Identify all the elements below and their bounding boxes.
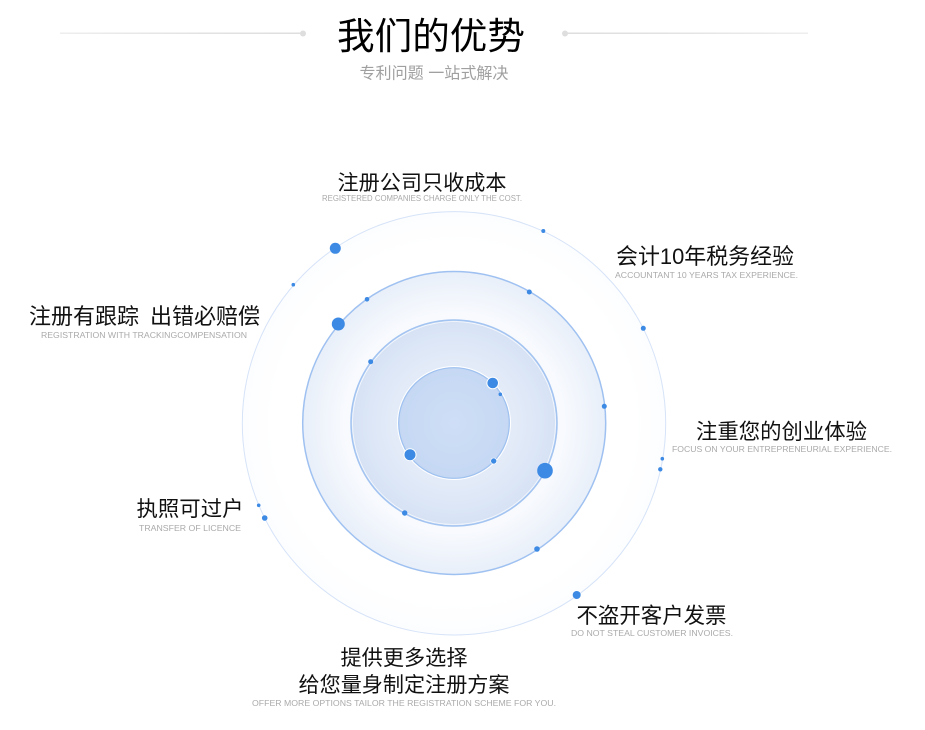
label: 会计10年税务经验: 会计10年税务经验 xyxy=(616,244,794,269)
label: 提供更多选择 给您量身制定注册方案 xyxy=(252,647,556,708)
label: 注册公司只收成本 xyxy=(322,172,522,203)
concentric circle diagram xyxy=(242,212,666,635)
label: 注册有跟踪 出错必赔偿 xyxy=(29,304,260,340)
label: 注重您的创业体验: 注重您的创业体验 xyxy=(696,420,867,444)
ring: outer xyxy=(242,212,666,635)
label: 提供更多选择 给您量身制定注册方案: 给您量身制定注册方案 xyxy=(298,674,510,697)
header divider: left xyxy=(60,30,306,36)
label: 不盗开客户发票: DO NOT STEAL CUSTOMER INVOICES. xyxy=(571,628,733,638)
label: 提供更多选择 给您量身制定注册方案: 提供更多选择 xyxy=(340,647,468,670)
label: 执照可过户: TRANSFER OF LICENCE xyxy=(139,523,241,533)
ring: second xyxy=(303,272,606,574)
label: 注册公司只收成本: REGISTERED COMPANIES CHARGE ONLY THE COST. xyxy=(322,193,522,203)
label: 注册有跟踪 出错必赔偿: 注册有跟踪 xyxy=(29,304,139,329)
subtitle: 专利问题 一站式解决 xyxy=(360,64,508,82)
ring: third xyxy=(351,320,557,526)
label: 会计10年税务经验: ACCOUNTANT 10 YEARS TAX EXPERIENCE. xyxy=(615,270,798,280)
label: 注册有跟踪 出错必赔偿: 出错必赔偿 xyxy=(150,304,260,329)
label: 注册有跟踪 出错必赔偿: REGISTRATION WITH TRACKINGCOMPENSATION xyxy=(41,330,247,340)
label: 注册公司只收成本: 注册公司只收成本 xyxy=(338,172,506,195)
label: 不盗开客户发票: 不盗开客户发票 xyxy=(576,604,726,628)
label: 执照可过户 xyxy=(136,498,244,533)
title: 我们的优势 xyxy=(337,16,525,57)
label: 注重您的创业体验: FOCUS ON YOUR ENTREPRENEURIAL EXPERIENCE. xyxy=(672,444,892,454)
label: 注重您的创业体验 xyxy=(672,420,892,454)
label: 不盗开客户发票 xyxy=(571,604,733,638)
label: 提供更多选择 给您量身制定注册方案: OFFER MORE OPTIONS TAILOR THE REGISTRATION SCHEME FOR YOU. xyxy=(252,698,556,708)
label: 执照可过户: 执照可过户 xyxy=(136,498,244,521)
orbit dots xyxy=(257,229,664,599)
header divider: right xyxy=(562,30,808,36)
ring: inner xyxy=(398,366,510,480)
label: 会计10年税务经验 xyxy=(615,244,798,280)
